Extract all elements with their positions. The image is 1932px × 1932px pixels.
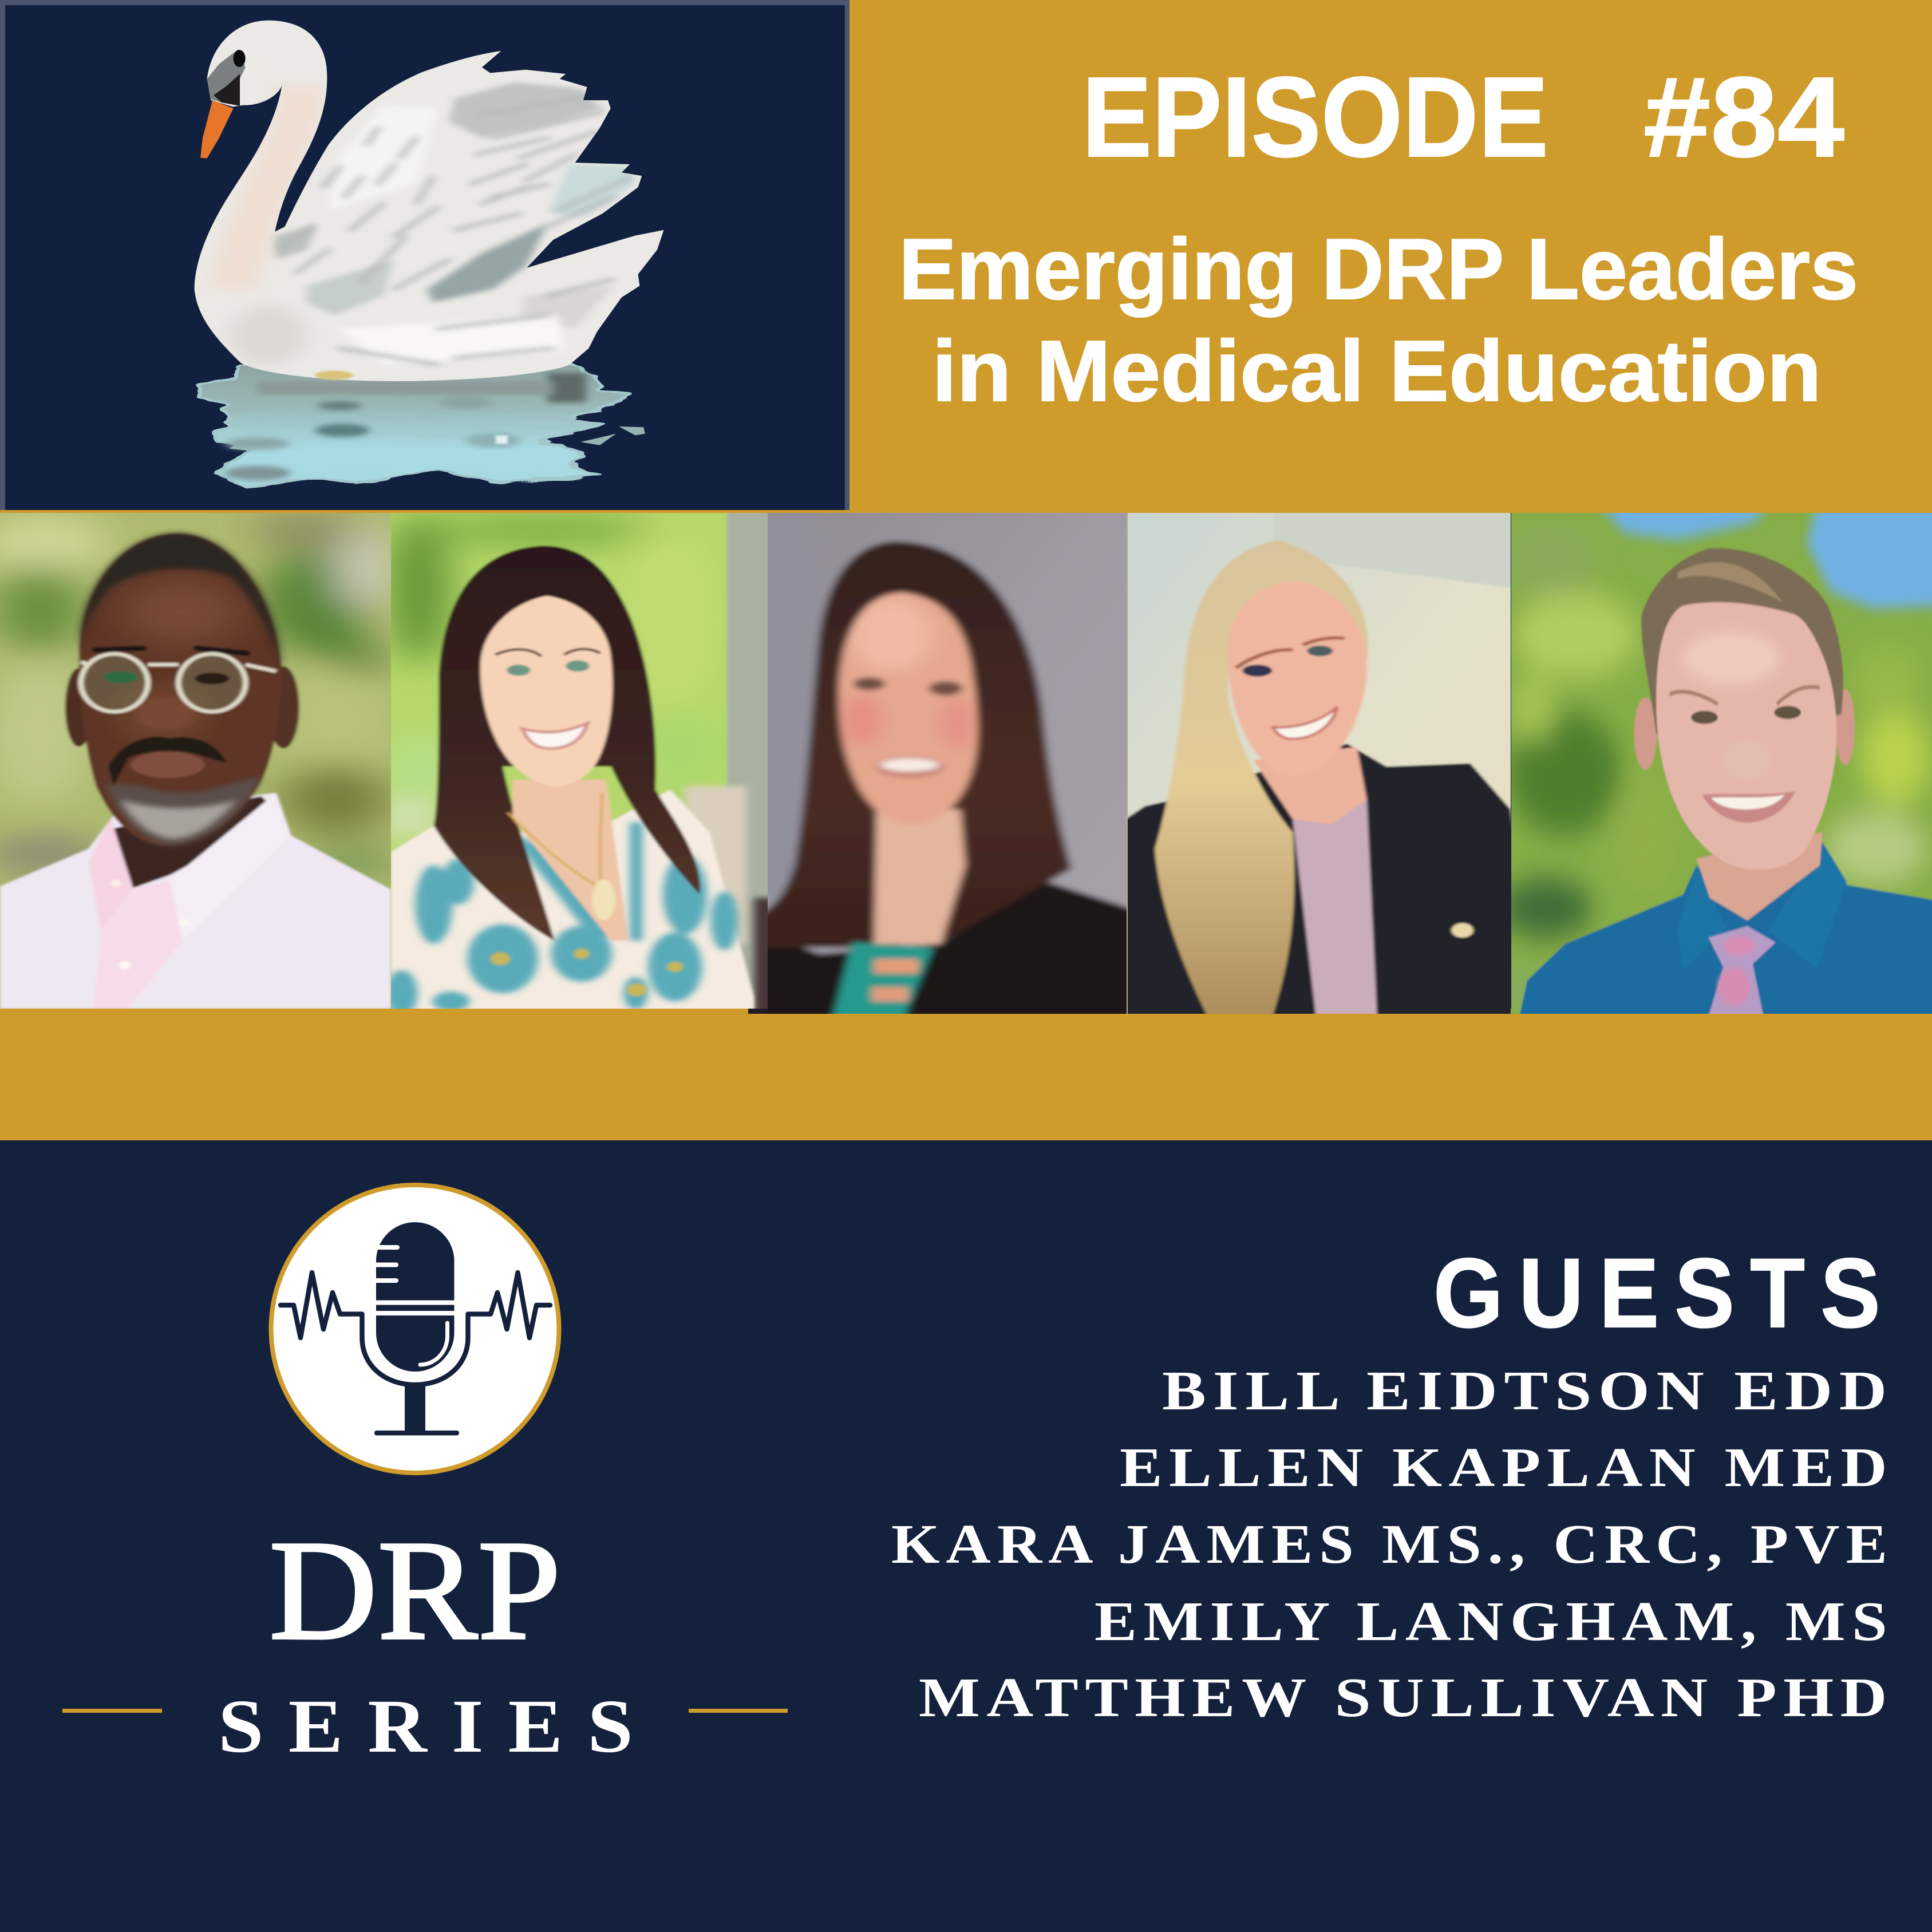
heading: episode number: EPISODE xyxy=(1082,54,1548,181)
microphone cradle and sound waves xyxy=(280,1273,550,1385)
neck and chest xyxy=(512,780,629,941)
divider left xyxy=(62,1709,162,1713)
heading: guests: GUESTS xyxy=(1433,1238,1896,1348)
guest: Ellen Kaplan: ELLEN KAPLAN MED xyxy=(1120,1437,1894,1499)
necklace xyxy=(508,793,602,888)
hair xyxy=(79,534,282,668)
logo text: SERIES: SERIES xyxy=(218,1684,658,1768)
photo strip gold backing xyxy=(0,510,1932,513)
heading: episode title line 1: Emerging DRP Leaders xyxy=(899,220,1858,317)
panel: gold band xyxy=(0,1009,1932,1140)
hair xyxy=(1641,548,1843,734)
tie xyxy=(1705,926,1776,1030)
guest: Bill Eidtson: BILL EIDTSON EDD xyxy=(1162,1360,1894,1422)
sky xyxy=(1589,491,1932,609)
photo: Matthew Sullivan xyxy=(1511,513,1932,1014)
swan head mask and eye xyxy=(207,49,246,106)
divider right xyxy=(689,1709,788,1713)
swan body xyxy=(195,21,664,381)
icon: watercolor swan xyxy=(195,21,664,487)
pin xyxy=(1452,923,1473,938)
swan beak xyxy=(200,100,234,159)
heading: episode number xyxy=(1082,54,1844,181)
neck xyxy=(1254,747,1367,824)
face xyxy=(1656,602,1836,870)
face xyxy=(1228,581,1367,775)
smile xyxy=(1702,791,1796,823)
beard xyxy=(106,776,261,846)
heading: episode number: #84 xyxy=(1643,54,1844,181)
microphone stand xyxy=(405,1384,425,1433)
photo strip dark sliver xyxy=(748,1009,768,1014)
icon: podcast microphone logo xyxy=(271,1185,559,1473)
heading: episode title line 2: in Medical Education xyxy=(932,322,1822,419)
microphone capsule xyxy=(376,1222,455,1372)
jacket xyxy=(1101,744,1544,1030)
guest: Matthew Sullivan: MATTHEW SULLIVAN PHD xyxy=(919,1667,1894,1729)
panel: navy lower section xyxy=(0,1140,1932,1932)
hair back xyxy=(434,546,700,941)
head xyxy=(79,534,282,846)
photo: Kara James xyxy=(768,513,1127,1014)
hair xyxy=(746,542,1072,947)
glasses xyxy=(81,654,276,712)
guest: Kara James: KARA JAMES MS., CRC, PVE xyxy=(891,1514,1894,1575)
swan reflection in water xyxy=(198,365,645,487)
neck xyxy=(1696,832,1823,920)
teal top xyxy=(830,942,933,1030)
neck xyxy=(874,809,965,944)
shirt xyxy=(0,793,391,1009)
lips xyxy=(131,752,204,778)
shirt xyxy=(1293,800,1378,1030)
hair xyxy=(1155,540,1368,1030)
swan shading xyxy=(230,82,635,365)
face xyxy=(839,592,978,825)
ears xyxy=(65,668,93,747)
blouse xyxy=(391,789,754,1029)
eyes and brows xyxy=(1670,687,1820,704)
photo: Emily Langham xyxy=(1128,513,1511,1014)
shirt xyxy=(1516,842,1932,1030)
guest: Emily Langham: EMILY LANGHAM, MS xyxy=(1095,1591,1894,1653)
photo: Ellen Kaplan xyxy=(391,513,768,1009)
face xyxy=(480,596,613,787)
panel: episode header gold xyxy=(850,0,1932,513)
guest list xyxy=(891,1360,1894,1729)
logo text: DRP: DRP xyxy=(269,1511,561,1670)
jacket xyxy=(741,882,1150,1030)
photo: Bill Eidtson xyxy=(0,513,391,1009)
panel: swan illustration xyxy=(0,0,850,513)
ears xyxy=(1634,698,1657,770)
photo divider line xyxy=(1127,513,1128,1014)
moustache xyxy=(108,737,227,786)
logo text: SERIES xyxy=(62,1684,788,1768)
nose xyxy=(136,698,195,730)
brows xyxy=(96,648,247,653)
